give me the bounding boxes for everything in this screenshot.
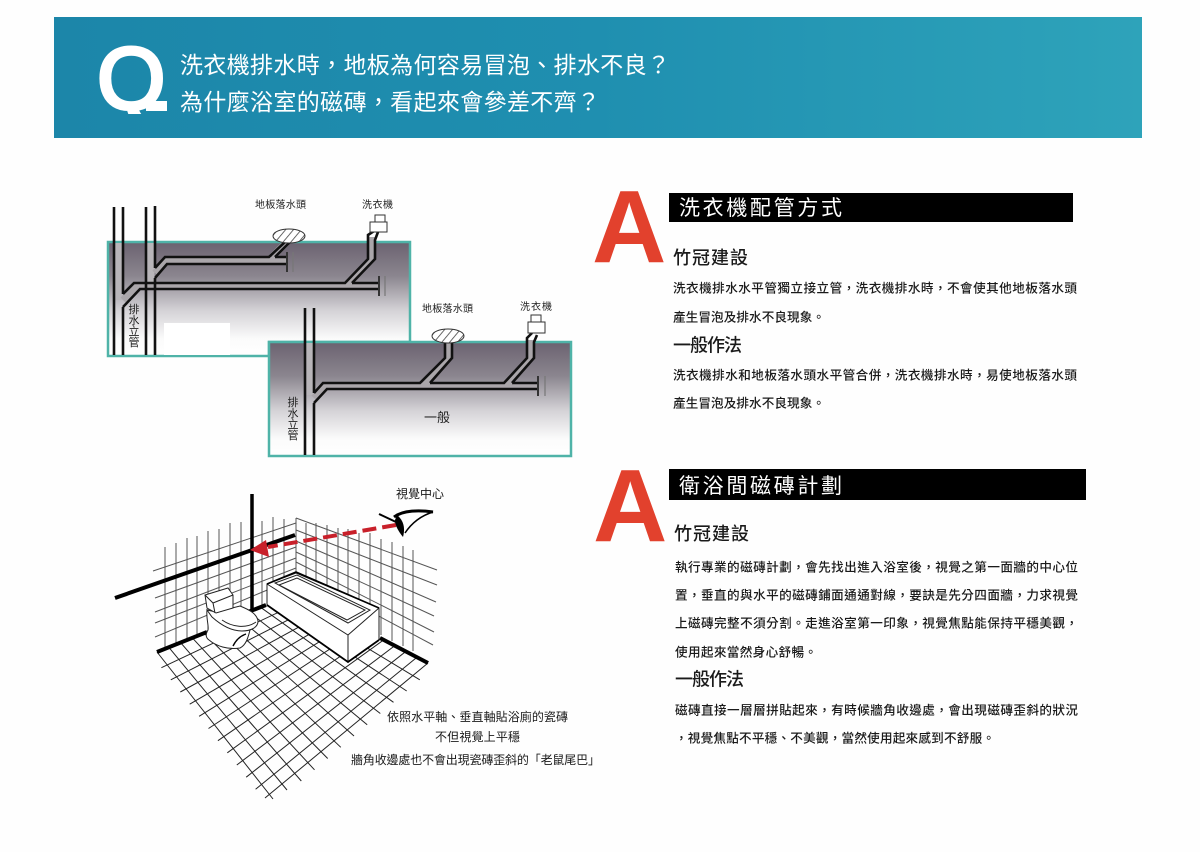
icon: washing machine — [370, 215, 387, 232]
body text: 產生冒泡及排水不良現象。 — [673, 310, 825, 324]
body text: 執行專業的磁磚計劃，會先找出進入浴室後，視覺之第一面牆的中心位 — [675, 560, 1078, 574]
caption — [351, 709, 600, 767]
icon: floor drain — [432, 329, 464, 343]
icon: washing machine — [528, 315, 545, 333]
caption: 不但視覺上平穩 — [435, 729, 520, 744]
label: drain stack: 立 — [288, 417, 298, 431]
body text — [673, 280, 1077, 324]
icon: floor drain — [273, 229, 305, 243]
answer panel: washer piping — [592, 169, 1077, 410]
left wall tile grid — [153, 517, 296, 649]
body text — [675, 560, 1078, 660]
label: washer: 洗衣機 — [520, 300, 552, 313]
label: drain stack: 立 — [128, 324, 140, 338]
label: general: 一般 — [424, 410, 450, 425]
body text — [673, 368, 1077, 410]
pipe diagram: general practice — [269, 300, 571, 456]
body text: 產生冒泡及排水不良現象。 — [673, 396, 825, 410]
label: drain stack — [288, 395, 298, 442]
Q letter — [99, 46, 167, 114]
label: drain stack: 水 — [288, 407, 298, 420]
icon: bathtub — [267, 572, 379, 662]
black title bar: 洗衣機配管方式 — [679, 197, 842, 220]
body text: 洗衣機排水水平管獨立接立管，洗衣機排水時，不會使其他地板落水頭 — [673, 280, 1077, 296]
heading: Zhuguan construction: 竹冠建設 — [673, 248, 748, 268]
label: drain stack: 排 — [288, 395, 298, 409]
icon: toilet — [205, 588, 258, 649]
floor tile grid — [157, 598, 428, 799]
label: drain stack: 水 — [128, 314, 140, 327]
red A letter: A — [593, 448, 667, 563]
body text: 置，垂直的與水平的磁磚鋪面通通對線，要訣是先分四面牆，力求視覺 — [675, 588, 1078, 602]
question text: 洗衣機排水時，地板為何容易冒泡、排水不良？ — [180, 52, 670, 78]
pipe diagram: Zhuguan construction — [108, 198, 410, 356]
Q letter: Q — [97, 29, 165, 128]
question text: 為什麼浴室的磁磚，看起來會參差不齊？ — [180, 89, 600, 115]
structural thick lines — [115, 494, 428, 663]
header banner: question — [54, 17, 1142, 138]
body text: 洗衣機排水和地板落水頭水平管合併，洗衣機排水時，易使地板落水頭 — [673, 368, 1077, 382]
question text — [180, 52, 670, 115]
label: washer: 洗衣機 — [362, 198, 393, 211]
body text: 使用起來當然身心舒暢。 — [675, 644, 817, 660]
heading: Zhuguan construction: 竹冠建設 — [674, 524, 749, 544]
black title bar — [669, 469, 1086, 500]
red A letter: A — [592, 169, 666, 284]
label: floor drain: 地板落水頭 — [422, 302, 473, 315]
heading: general practice: 一般作法 — [675, 670, 744, 690]
body text: ，視覺焦點不平穩、不美觀，當然使用起來感到不舒服。 — [675, 730, 995, 746]
label: floor drain: 地板落水頭 — [255, 198, 306, 211]
red sight-line arrow — [250, 525, 396, 557]
answer panel: bathroom tile plan — [593, 448, 1086, 746]
label: visual center: 視覺中心 — [396, 486, 444, 501]
label: drain stack: 管 — [128, 335, 140, 349]
body text — [675, 702, 1078, 746]
icon: eye — [379, 511, 433, 537]
label: drain stack — [128, 302, 140, 349]
right wall tile grid — [296, 518, 437, 651]
caption: 依照水平軸、垂直軸貼浴廁的瓷磚 — [387, 709, 568, 724]
black title bar: 衛浴間磁磚計劃 — [679, 475, 842, 498]
label: drain stack: 排 — [128, 302, 140, 316]
label: drain stack: 管 — [288, 428, 298, 442]
heading: general practice: 一般作法 — [673, 336, 742, 356]
bathroom tile illustration — [115, 486, 600, 799]
black title bar — [669, 193, 1073, 222]
caption: 牆角收邊處也不會出現瓷磚歪斜的「老鼠尾巴」 — [351, 752, 600, 767]
body text: 磁磚直接一層層拼貼起來，有時候牆角收邊處，會出現磁磚歪斜的狀況 — [675, 702, 1078, 718]
body text: 上磁磚完整不須分割。走進浴室第一印象，視覺焦點能保持平穩美觀， — [675, 616, 1078, 630]
